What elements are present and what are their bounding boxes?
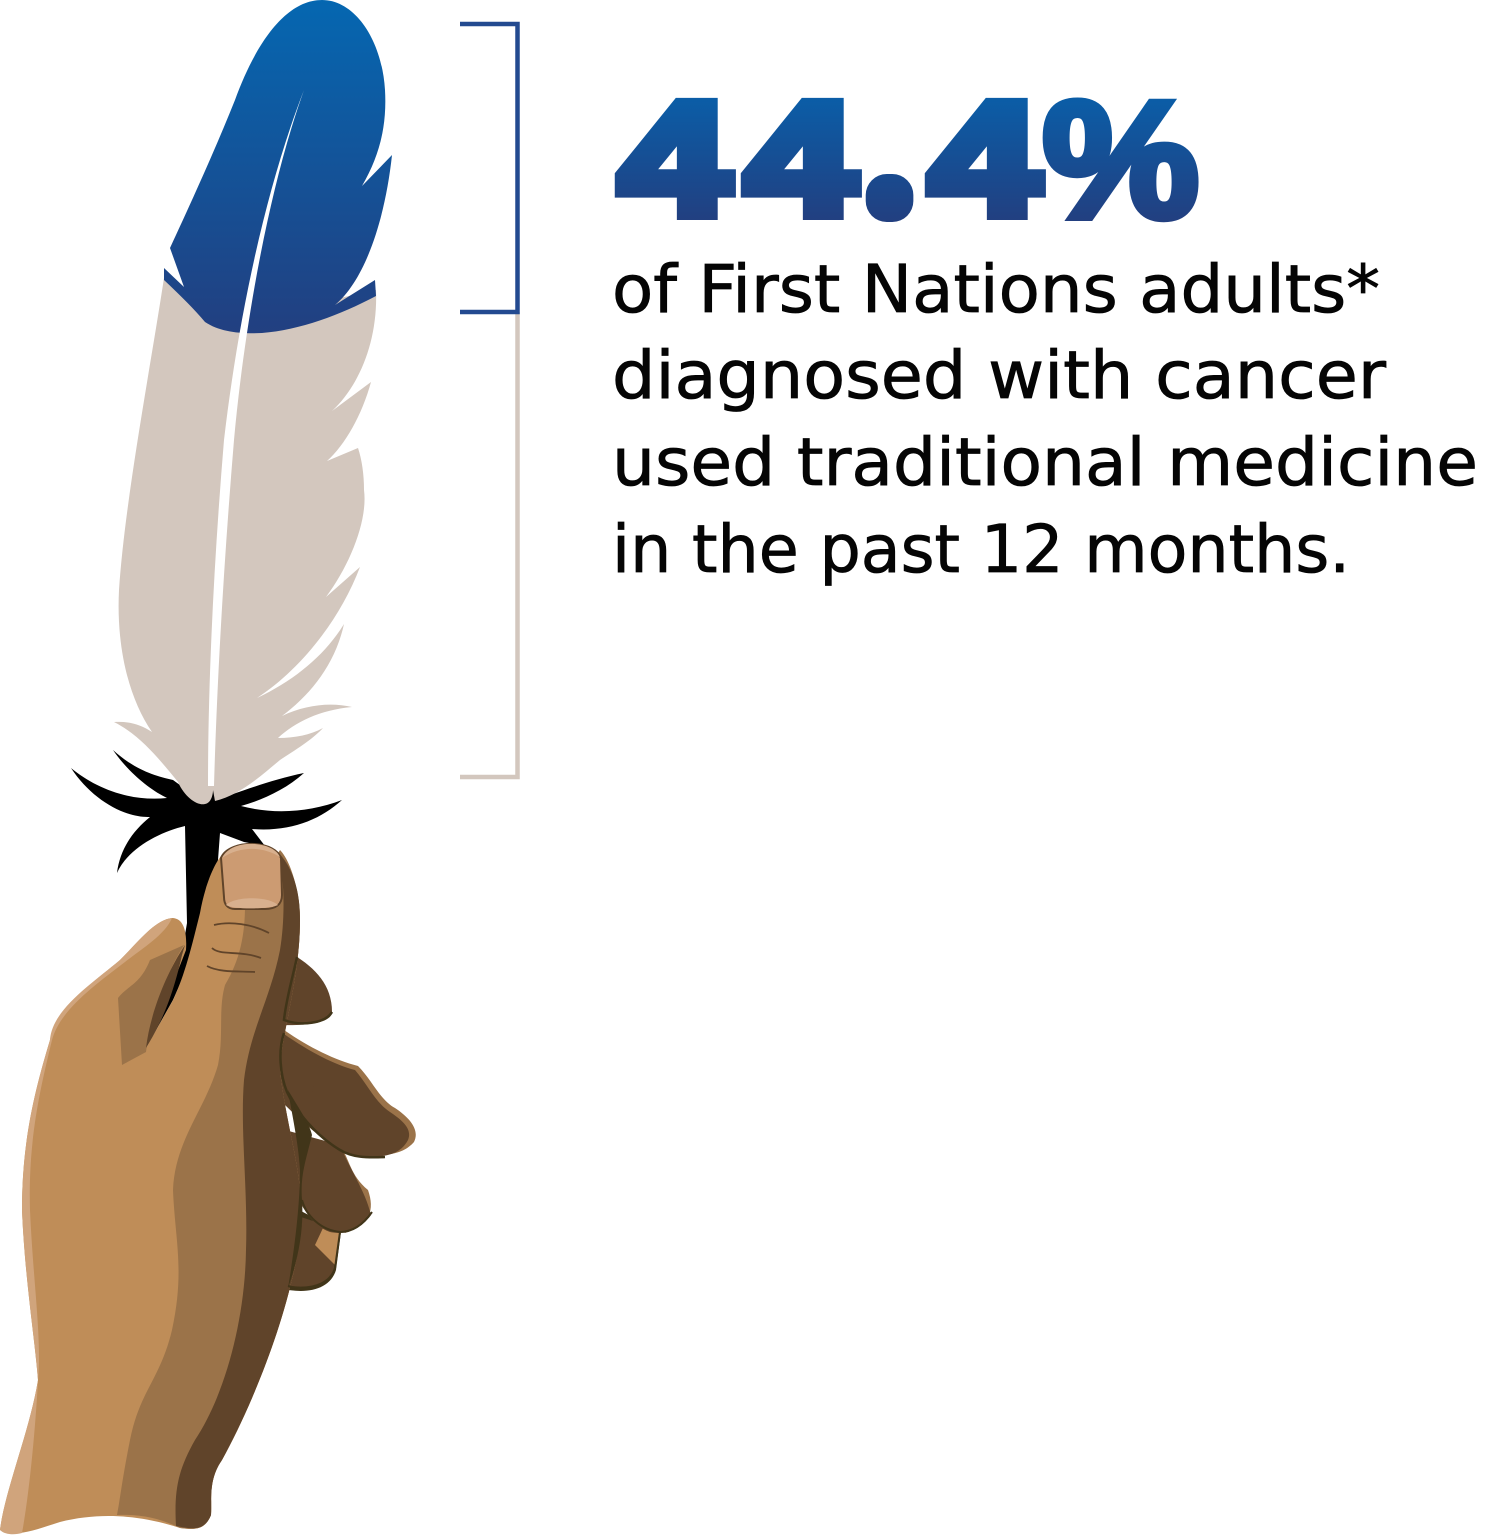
description text xyxy=(612,251,1478,588)
big statistic: % xyxy=(1042,68,1199,253)
big statistic: 4 xyxy=(929,70,1040,249)
illustration: hand holding feather xyxy=(0,0,416,1534)
description text: of First Nations adults* xyxy=(612,251,1380,328)
description text: diagnosed with cancer xyxy=(612,337,1387,414)
feather tip: blue xyxy=(164,0,392,333)
feather vane: beige xyxy=(114,278,376,804)
bracket: beige lower section xyxy=(460,312,518,777)
lower curled fingers xyxy=(270,955,416,1291)
description text: in the past 12 months. xyxy=(612,511,1350,588)
finger crease shadow xyxy=(280,957,385,1288)
hand: palm and wrist xyxy=(0,843,302,1533)
thumb knuckle lines xyxy=(207,923,313,1120)
thumb nail xyxy=(221,844,282,909)
big statistic xyxy=(619,68,1199,253)
hand: dark shadow xyxy=(176,852,302,1528)
hand: mid shadow xyxy=(117,850,302,1529)
big statistic: 4 xyxy=(745,70,856,249)
icon: black feather fluff xyxy=(71,750,342,1048)
big statistic: . xyxy=(884,166,895,210)
bracket: blue upper section xyxy=(460,24,518,312)
description text: used traditional medicine xyxy=(612,424,1478,501)
feather shaft xyxy=(208,90,304,786)
big statistic: 4 xyxy=(619,70,730,249)
palm fold shadow xyxy=(118,945,184,1065)
hand: left highlight xyxy=(0,918,172,1534)
